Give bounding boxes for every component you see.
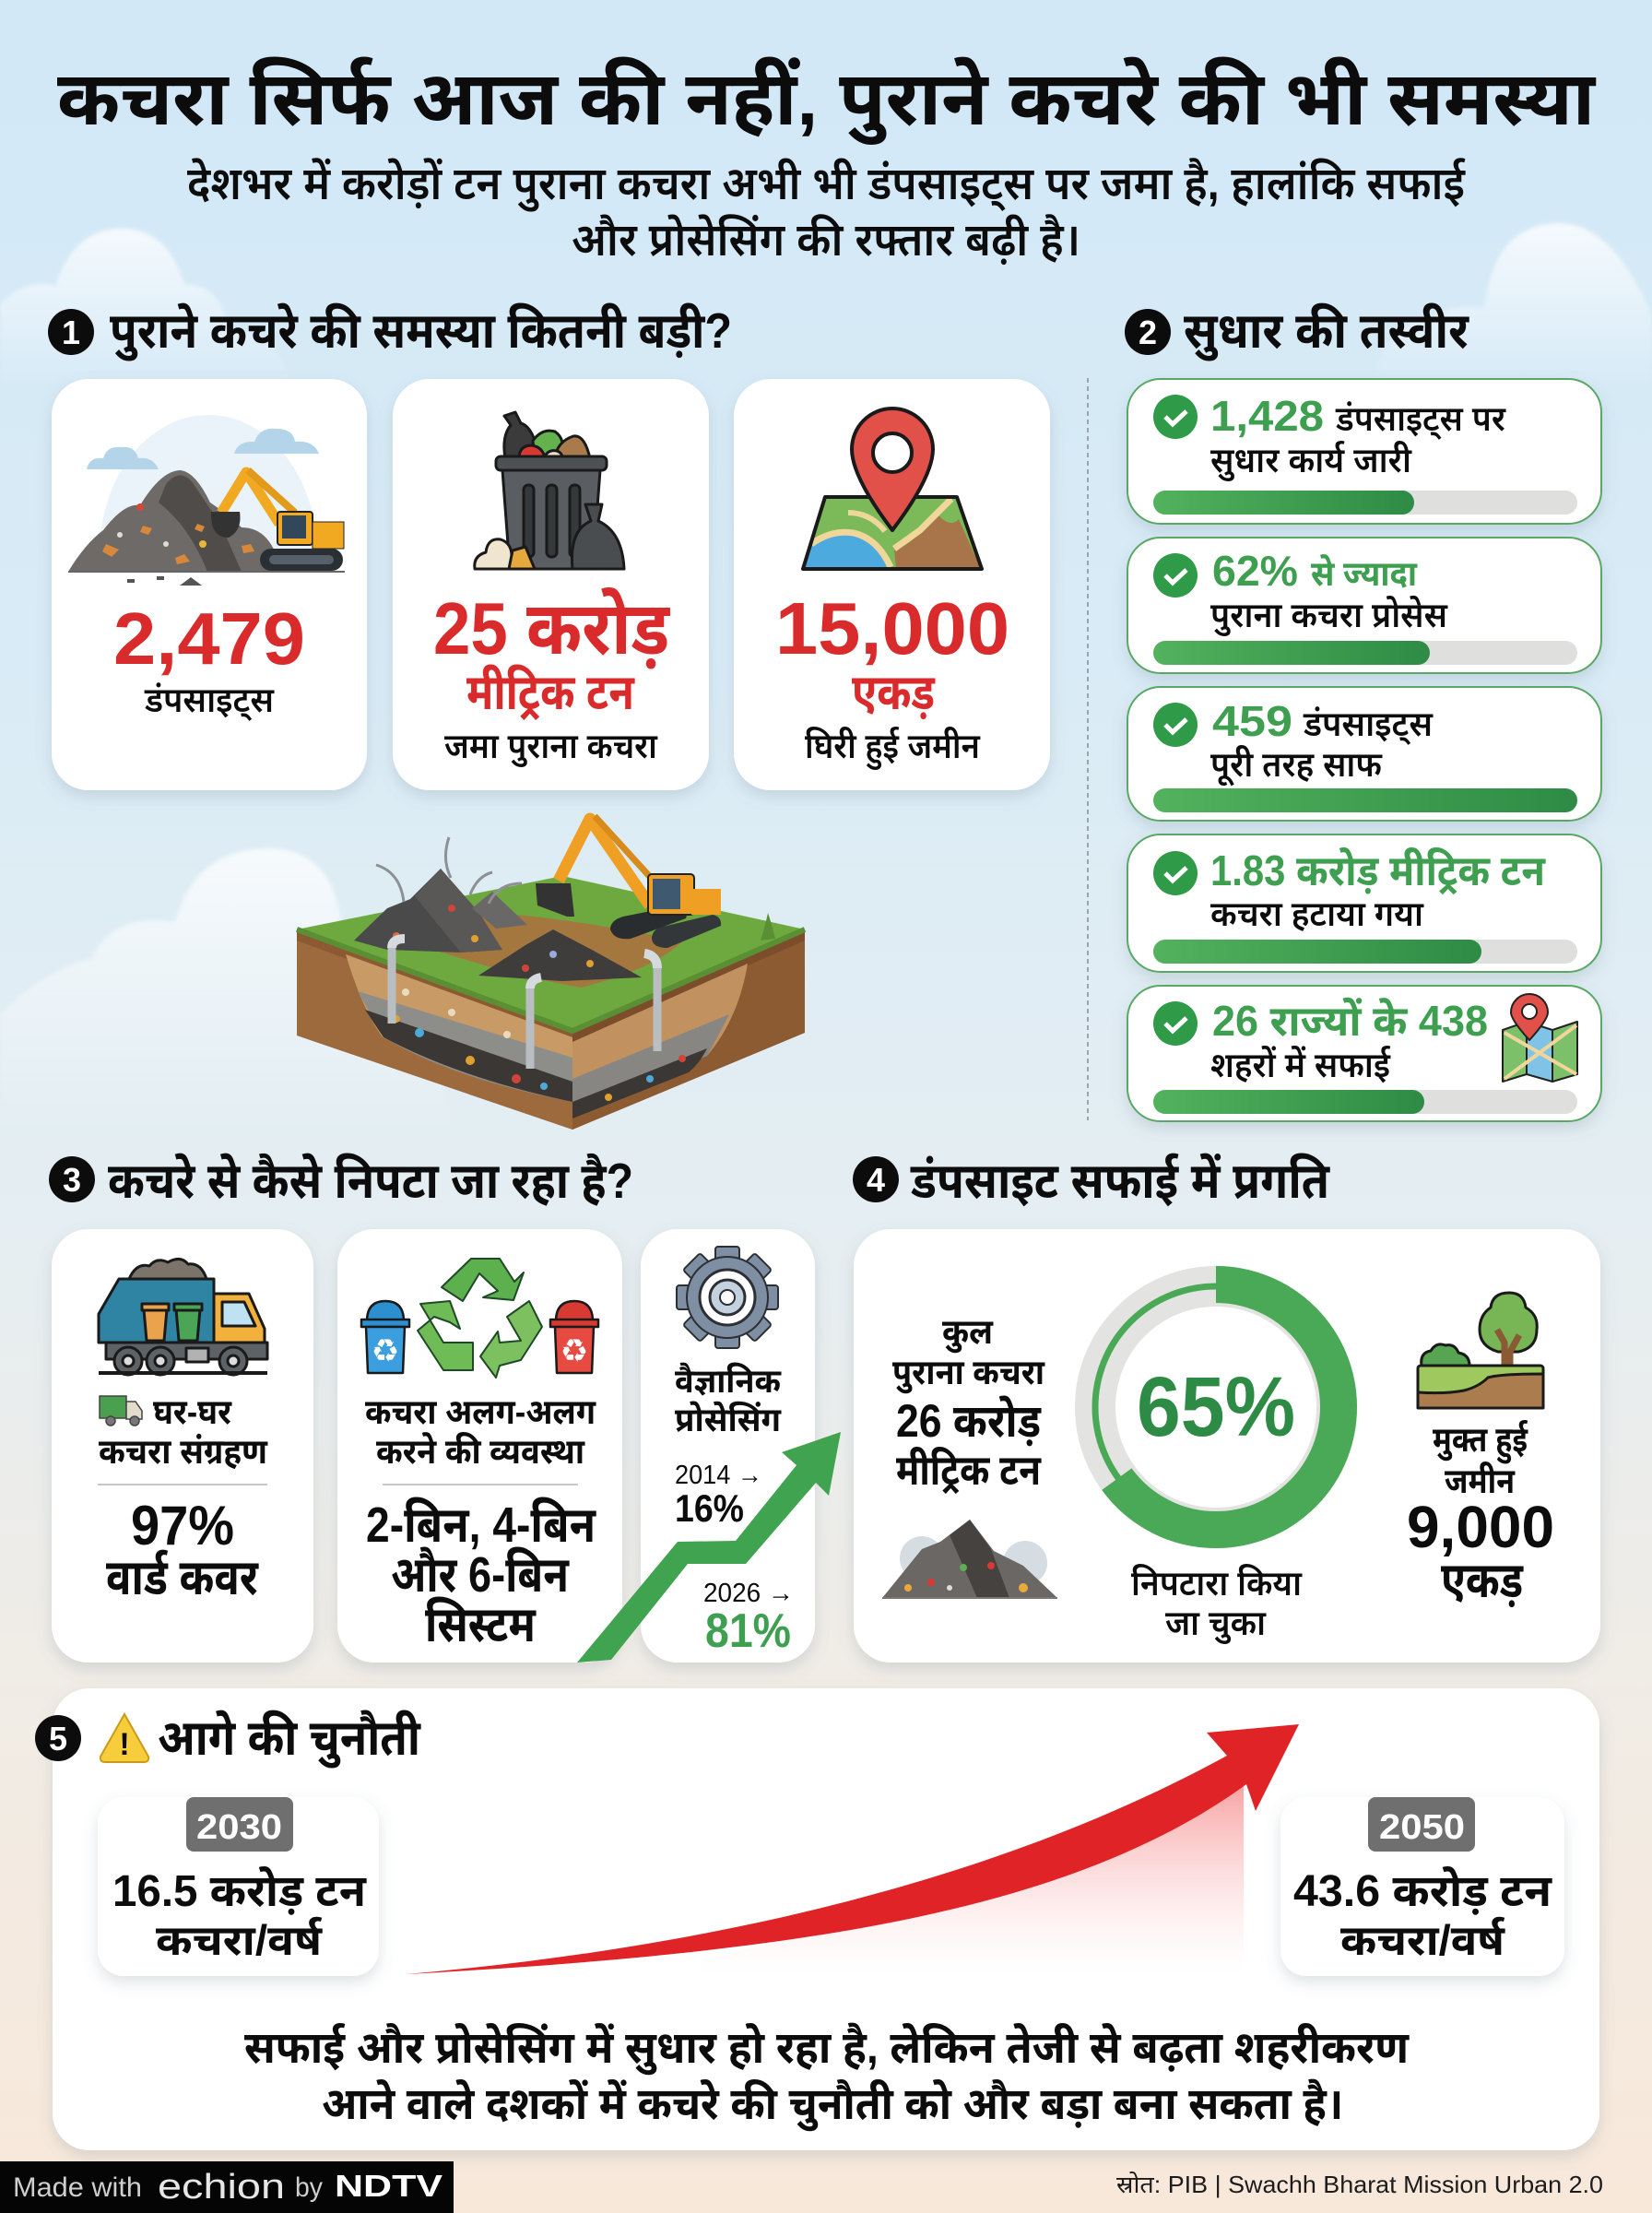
subtitle [187,158,1466,266]
panel: dumpsite clearing progress: एकड़ [1441,1553,1524,1608]
panel: scientific processing: 2026 → [703,1579,794,1608]
panel: dumpsites stat: डंपसाइट्स [144,681,275,722]
panel: progress 2: से ज्यादा [1311,553,1418,594]
heading 3: 3 [63,1161,81,1199]
panel: progress 2: पुराना कचरा प्रोसेस [1210,595,1448,637]
icon: check [1153,395,1198,439]
card: 2050: 43.6 करोड़ टन [1293,1866,1552,1916]
panel: dumpsite clearing progress: मीट्रिक टन [896,1446,1042,1495]
icon: freed land with tree [1418,1293,1543,1408]
chart: growth arrow [406,1724,1299,1975]
icon: check [1153,553,1198,598]
divider [1087,378,1089,1120]
panel: occupied land stat: घिरी हुई जमीन [805,726,981,770]
heading 2: सुधार की तस्वीर [1184,302,1469,362]
icon: blue bin [361,1301,409,1373]
panel: progress 1: सुधार कार्य जारी [1210,440,1412,482]
panel: scientific processing: 81% [705,1604,791,1658]
icon: red bin: ♻ [562,1337,586,1365]
arrow: processing growth [577,1432,841,1663]
panel: legacy waste stat [393,379,709,790]
footer: brand badge: echion [158,2168,285,2207]
heading 1: 1 [62,314,80,351]
panel: scientific processing: प्रोसेसिंग [675,1400,782,1438]
closing message [244,2022,1410,2131]
card: 2050: 2050 [1379,1808,1465,1847]
panel: progress 1 [1127,379,1601,524]
footer: brand badge: Made with [13,2172,142,2203]
panel: dumpsite clearing progress: पुराना कचरा [892,1354,1045,1394]
panel: scientific processing: 16% [675,1486,744,1530]
icon: mini truck [100,1396,142,1426]
card: 2050 [1280,1797,1564,1976]
panel: progress 2 [1127,538,1601,673]
panel: dumpsite clearing progress: मुक्त हुई [1433,1419,1528,1464]
heading 5 [35,1710,421,1769]
panel: legacy waste stat: मीट्रिक टन [466,664,635,721]
icon: check [1153,1001,1198,1046]
panel: progress 5 [1127,986,1601,1121]
footer: brand badge: by [295,2172,323,2203]
panel: door-to-door collection: 97% [131,1495,234,1556]
panel: scientific processing: वैज्ञानिक [675,1361,782,1400]
panel: dumpsite clearing progress: निपटारा किया [1131,1563,1303,1604]
chart: 65 percent donut [1093,1284,1339,1530]
footer: source: स्रोत: PIB | Swachh Bharat Mission Urban 2.0 [1116,2171,1603,2198]
panel: occupied land stat: एकड़ [852,665,936,720]
card: 2030: 2030 [196,1808,282,1847]
panel: legacy waste stat: 25 करोड़ [433,587,670,669]
subtitle: और प्रोसेसिंग की रफ्तार बढ़ी है। [572,214,1080,266]
panel: waste segregation [337,1229,622,1663]
heading 5: आगे की चुनौती [158,1710,421,1769]
footer: brand badge [0,2161,454,2213]
panel: progress 4 [1127,834,1601,972]
card: 2030 [98,1797,379,1976]
card: 2030: कचरा/वर्ष [156,1916,323,1964]
panel: progress 3: पूरी तरह साफ [1210,744,1383,787]
closing message: आने वाले दशकों में कचरे की चुनौती को और बड़ा बना सकता है। [322,2078,1343,2131]
footer: brand badge: NDTV [335,2169,442,2203]
icon: map with pin [803,408,982,569]
panel: dumpsite clearing progress: जमीन [1445,1461,1516,1501]
panel: progress 2: 62% [1212,547,1298,595]
icon: garbage truck [99,1259,267,1375]
panel: occupied land stat: 15,000 [775,587,1009,669]
panel: dumpsite clearing progress: कुल [942,1313,994,1354]
panel: progress 1: डंपसाइट्स पर [1335,400,1506,441]
closing message: सफाई और प्रोसेसिंग में सुधार हो रहा है, लेकिन तेजी से बढ़ता शहरीकरण [244,2022,1410,2075]
heading 5: 5 [49,1720,67,1757]
panel: dumpsites stat [52,379,367,790]
heading 5: ! [119,1727,130,1762]
panel: dumpsite clearing progress: 26 करोड़ [896,1395,1042,1447]
icon: dump and excavator [68,415,345,586]
panel: progress 1: 1,428 [1210,392,1324,440]
icon: gear [677,1247,778,1348]
panel: dumpsite clearing progress [854,1229,1600,1663]
panel: progress 4: कचरा हटाया गया [1210,895,1424,934]
panel: future challenge [35,1688,1599,2150]
icon: check [1153,851,1198,895]
icon: overflowing dustbin [475,412,624,569]
chart: 65 percent donut: 65% [1137,1360,1295,1454]
illustration: landfill cross-section [297,816,805,1130]
panel: waste segregation: कचरा अलग-अलग [365,1393,596,1432]
heading 3: कचरे से कैसे निपटा जा रहा है? [108,1153,633,1209]
icon: check [1153,703,1198,747]
panel: progress 4: 1.83 करोड़ मीट्रिक टन [1210,846,1546,895]
panel: scientific processing: 2014 → [675,1461,762,1490]
icon: folded map [1503,994,1577,1082]
icon: blue bin: ♻ [373,1337,397,1365]
panel: door-to-door collection: वार्ड कवर [106,1549,259,1605]
panel: occupied land stat [734,379,1050,790]
panel: dumpsites stat: 2,479 [113,598,305,680]
subtitle: देशभर में करोड़ों टन पुराना कचरा अभी भी डंपसाइट्स पर जमा है, हालांकि सफाई [187,158,1466,212]
panel: waste segregation: 2-बिन, 4-बिन [366,1497,597,1553]
panel: scientific processing [641,1229,815,1663]
title: कचरा सिर्फ आज की नहीं, पुराने कचरे की भी समस्या [57,56,1597,145]
panel: waste segregation: और 6-बिन [391,1546,570,1603]
panel: waste segregation: करने की व्यवस्था [376,1431,585,1472]
panel: door-to-door collection: कचरा संग्रहण [99,1433,268,1472]
panel: progress 3 [1127,687,1601,821]
panel: progress 3: डंपसाइट्स [1303,705,1434,746]
icon: waste mound [882,1520,1057,1599]
heading 4: डंपसाइट सफाई में प्रगति [910,1153,1330,1209]
panel: legacy waste stat: जमा पुराना कचरा [444,728,658,768]
icon: red bin [550,1301,598,1373]
panel: progress 3: 459 [1212,697,1292,745]
panel: progress 5: 26 राज्यों के 438 [1212,996,1488,1045]
panel: dumpsite clearing progress: 9,000 [1407,1494,1554,1560]
icon: recycling symbol [418,1259,542,1378]
panel: progress 5: शहरों में सफाई [1210,1045,1391,1085]
heading 1: पुराने कचरे की समस्या कितनी बड़ी? [110,302,732,362]
card: 2050: कचरा/वर्ष [1340,1916,1505,1964]
panel: door-to-door collection: घर-घर [153,1393,232,1432]
heading 2: 2 [1139,314,1157,351]
panel: waste segregation: सिस्टम [425,1596,537,1652]
heading 4: 4 [867,1161,885,1199]
panel: door-to-door collection [52,1229,313,1663]
panel: dumpsite clearing progress: जा चुका [1165,1604,1267,1645]
card: 2030: 16.5 करोड़ टन [112,1866,367,1916]
